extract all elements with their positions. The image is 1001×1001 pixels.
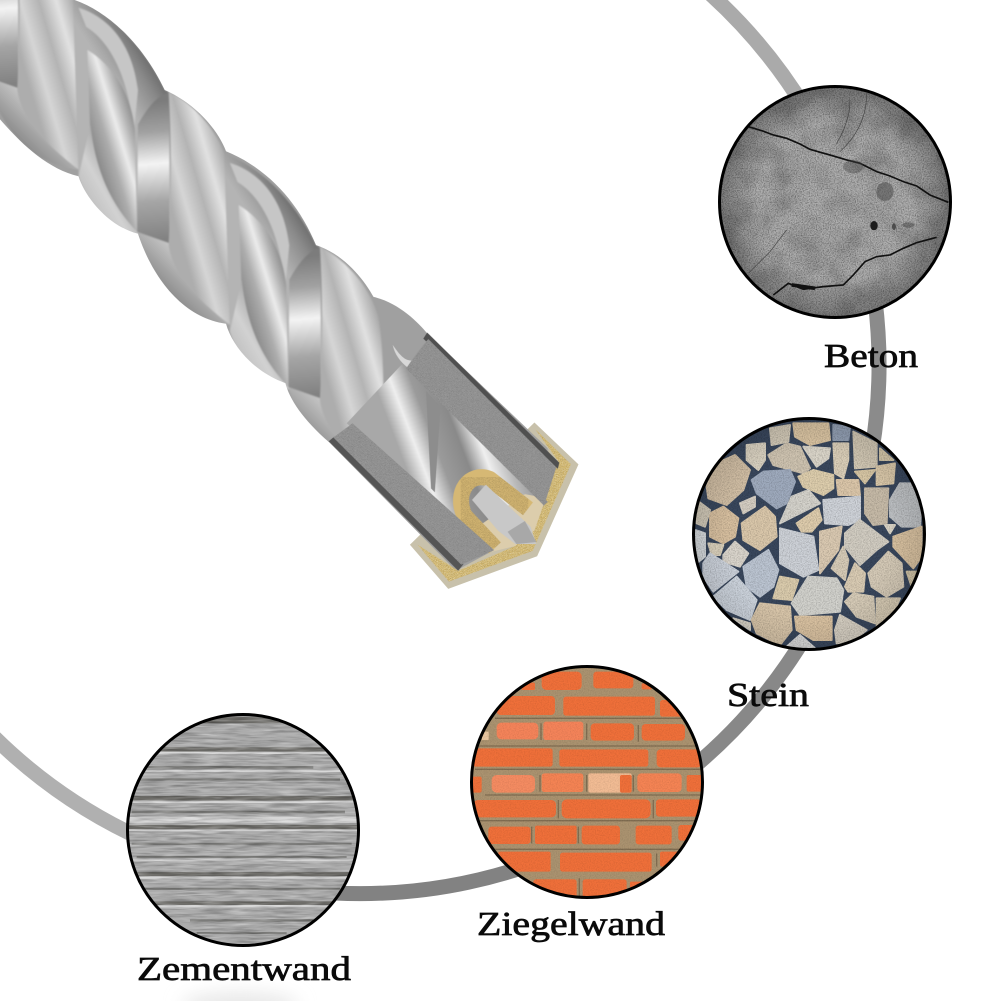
circle outline [128, 714, 358, 946]
prism tip shade [508, 521, 536, 544]
label: Stein: Stein [727, 677, 809, 714]
circle outline [472, 666, 702, 898]
material circle: Ziegelwand (brick wall) [468, 663, 706, 901]
material circle: Beton (concrete) [718, 85, 952, 319]
gold U-shaped core [461, 477, 528, 548]
groove dark line [426, 391, 441, 492]
bottom shadow smudge [182, 992, 298, 1001]
curved grey arc connecting the materials [0, 0, 879, 894]
spiral drill body [0, 0, 548, 586]
lower ground face [329, 423, 494, 571]
gold band over body end [418, 429, 571, 582]
pale carbide centre [475, 494, 546, 552]
label: Beton: Beton [824, 338, 918, 375]
material circle: Stein (stone) [690, 415, 928, 653]
carbide gold tip base [410, 423, 578, 589]
drill bit [0, 0, 578, 589]
upper ground face [393, 333, 559, 506]
label: Ziegelwand: Ziegelwand [477, 906, 665, 943]
grey prism core [472, 485, 536, 544]
circle outline [720, 86, 950, 318]
circle outline [694, 418, 924, 650]
material circle: Zementwand (cement wall) [124, 711, 362, 949]
central groove [347, 364, 548, 552]
label: Zementwand: Zementwand [137, 951, 351, 988]
